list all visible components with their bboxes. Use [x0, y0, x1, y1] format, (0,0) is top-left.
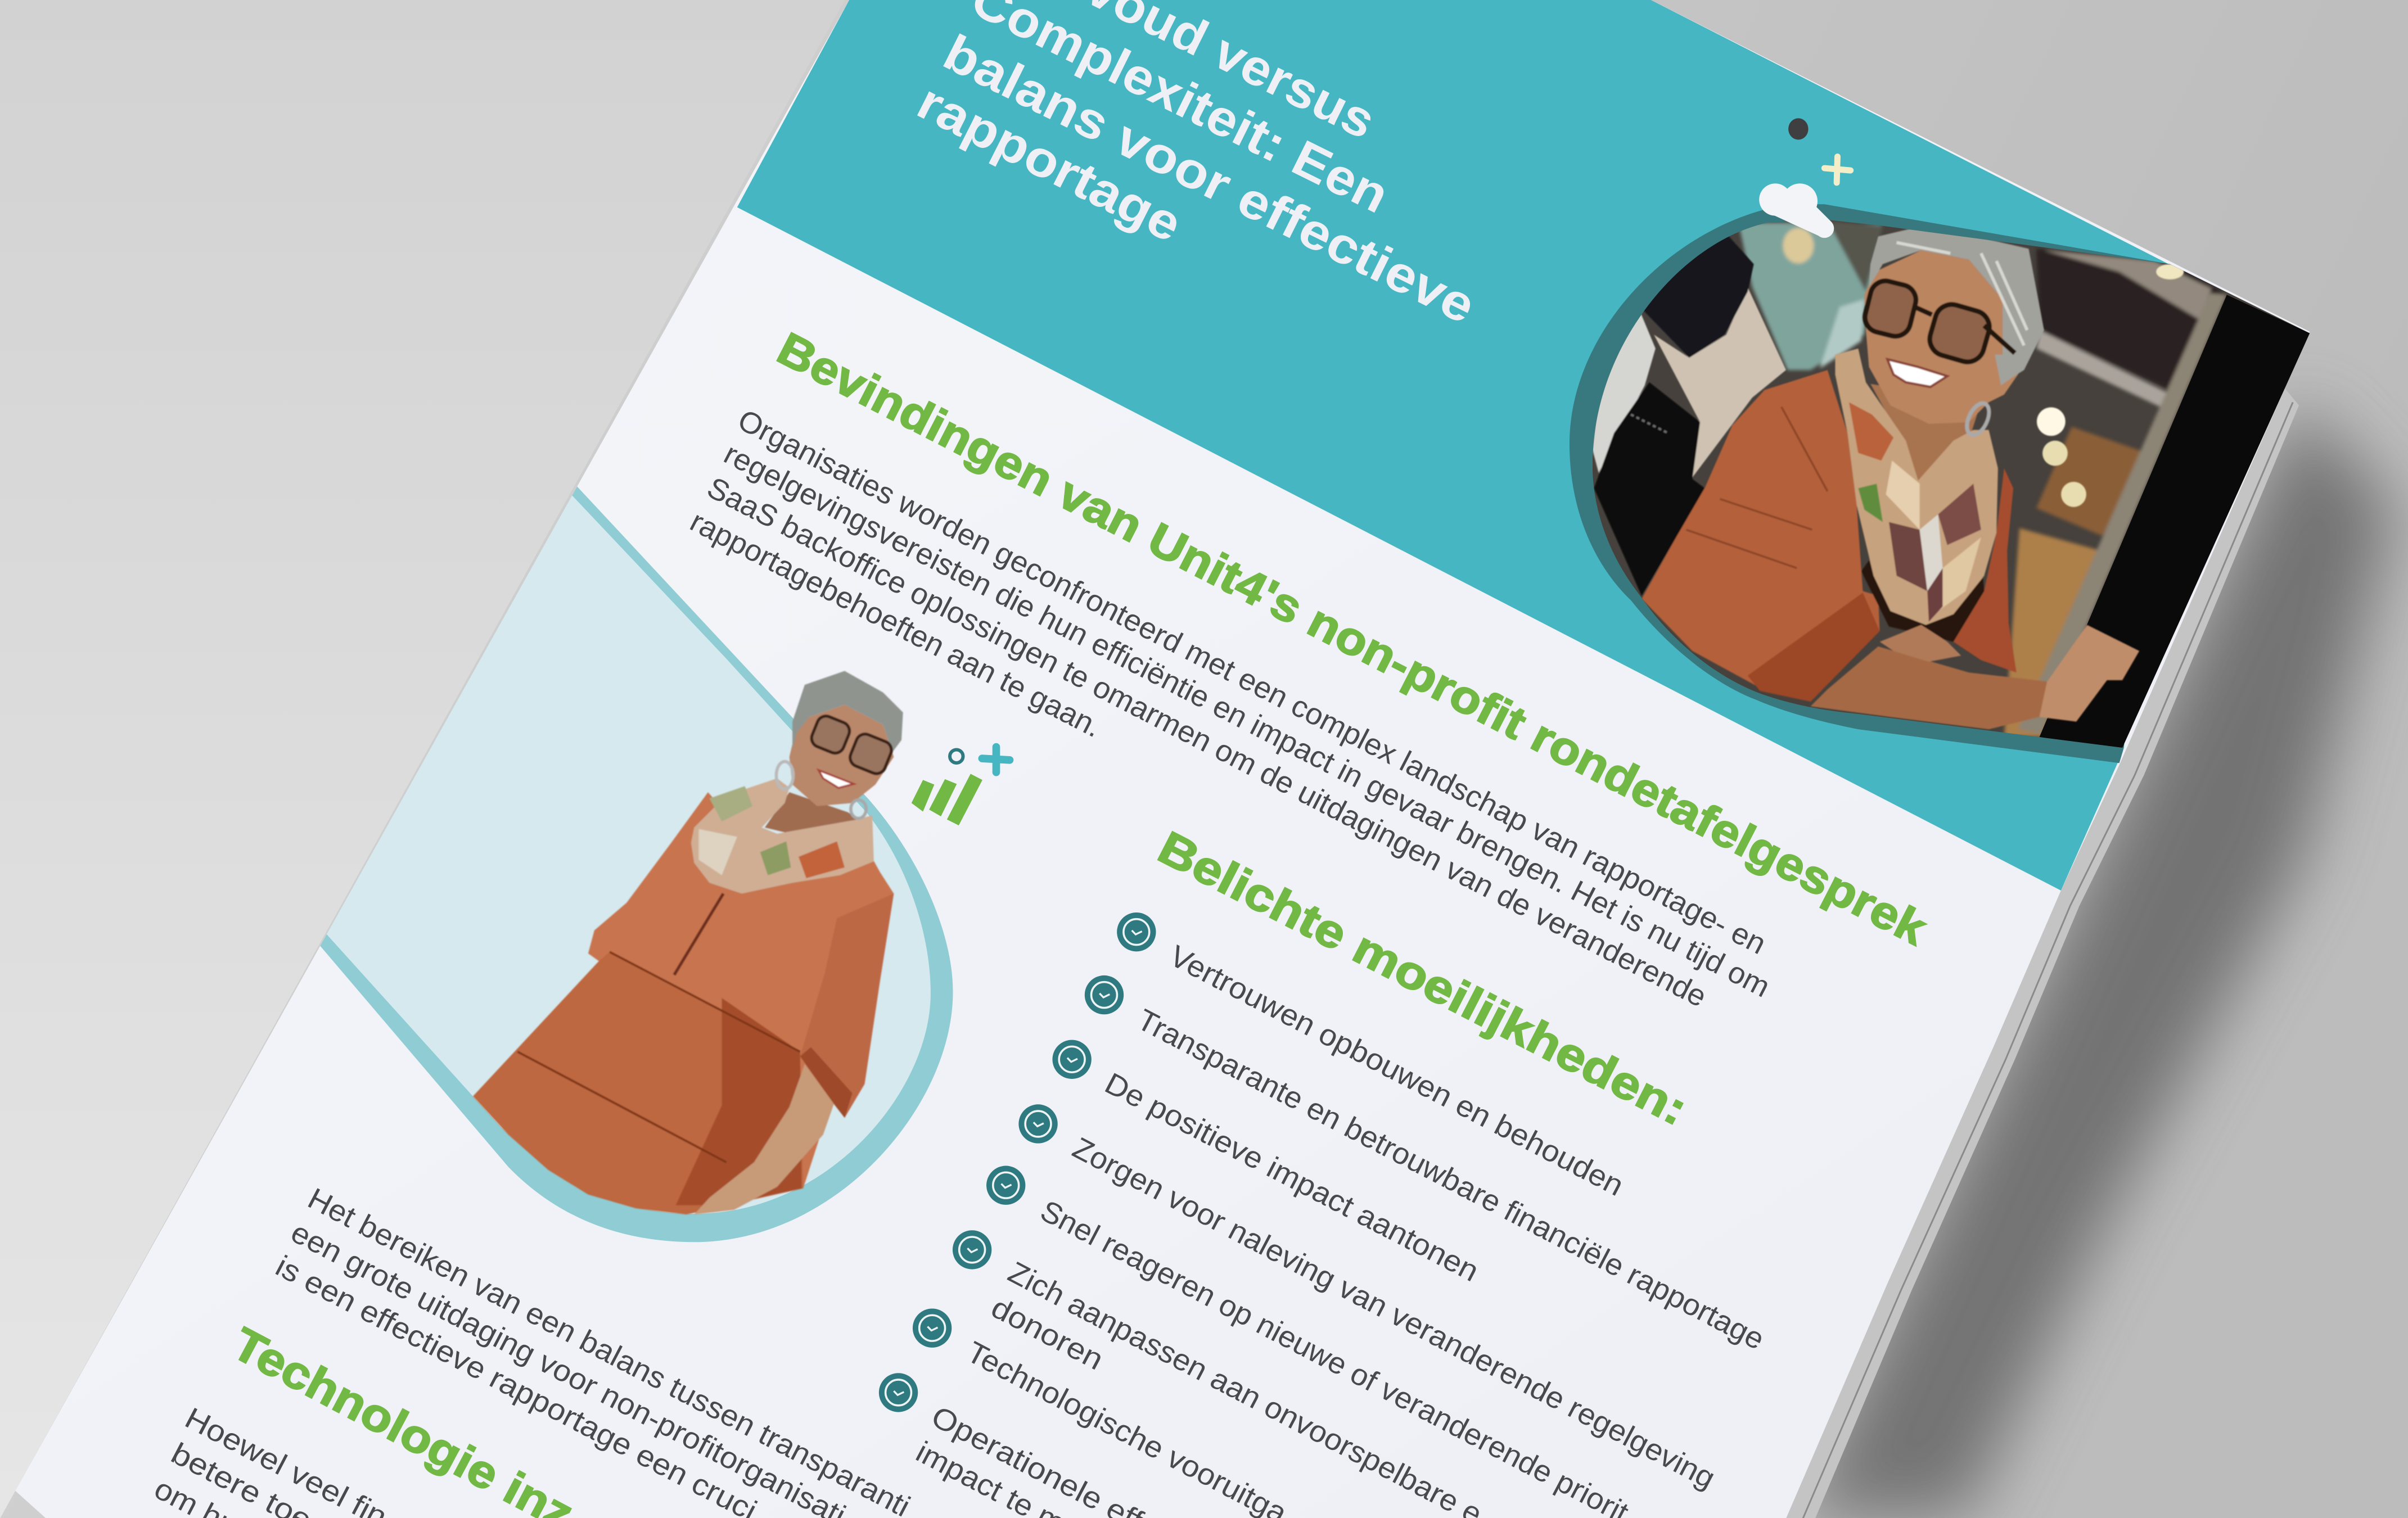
heading: Belichte moeilijkheden: Belichte moeilijkheden:: [1150, 822, 1695, 1135]
text block: balance paragraph: een grote uitdaging voor non-profitorganisati: [286, 1216, 851, 1518]
list: bullets with text: Zich aanpassen aan onvoorspelbare e: [1003, 1255, 1487, 1518]
list: bullets with text: Transparante en betrouwbare financiële rapportage: [1132, 1003, 1770, 1356]
list: bullets with text: Zorgen voor naleving van veranderende regelgeving: [1067, 1131, 1720, 1496]
icon: cream plus: [1824, 157, 1851, 183]
panel: light blue drop with woman: [315, 485, 953, 1242]
text block: intro: regelgevingsvereisten die hun efficiëntie en impact in gevaar brengen. Het is nu tijd om: [719, 437, 1775, 1004]
text block: balance paragraph: Het bereiken van een balans tussen transparanti: [303, 1182, 916, 1518]
bullet icons: [879, 912, 1156, 1412]
heading: Bevindingen: Bevindingen van Unit4's non-profit rondetafelgesprek: [769, 323, 1935, 955]
paper stack edge: [1774, 387, 2299, 1518]
icon: bar chart with dot and plus: [912, 747, 1010, 825]
list: bullets with text: Vertrouwen opbouwen en behouden: [1164, 939, 1629, 1203]
list: bullets with text: Technologische vooruitga: [961, 1335, 1292, 1518]
title: rapportage: [909, 73, 1191, 253]
photo: smiling woman in a cafe: [1593, 220, 2310, 748]
list: bullets with text: De positieve impact aantonen: [1099, 1067, 1484, 1288]
list: bullets with text: donoren: [986, 1291, 1109, 1377]
list: bullets with text: Snel reageren op nieuwe of veranderende priorit: [1035, 1194, 1634, 1518]
icon: white cloud: [1759, 183, 1834, 238]
panel: teal header band: [737, 0, 2181, 891]
text block: intro: Organisaties worden geconfronteerd met een complex landschap van rapportage- en: [733, 403, 1771, 961]
drop: inner fill: [315, 491, 931, 1214]
text block: balance paragraph: is een effectieve rapportage een cruci: [270, 1249, 762, 1518]
figure: standing woman in orange dress: [473, 671, 903, 1214]
list: bullets with text: [879, 912, 1770, 1518]
text block: intro: rapportagebehoeften aan te gaan.: [685, 505, 1107, 744]
text block: intro: SaaS backoffice oplossingen te omarmen om de uitdagingen van de veranderende: [702, 471, 1712, 1014]
title: balans voor effectieve: [935, 24, 1484, 335]
drop: outer band: [315, 485, 953, 1242]
icon: dark dot: [1788, 118, 1809, 140]
drop frame: dark teal border of header photo: [1570, 204, 2170, 763]
